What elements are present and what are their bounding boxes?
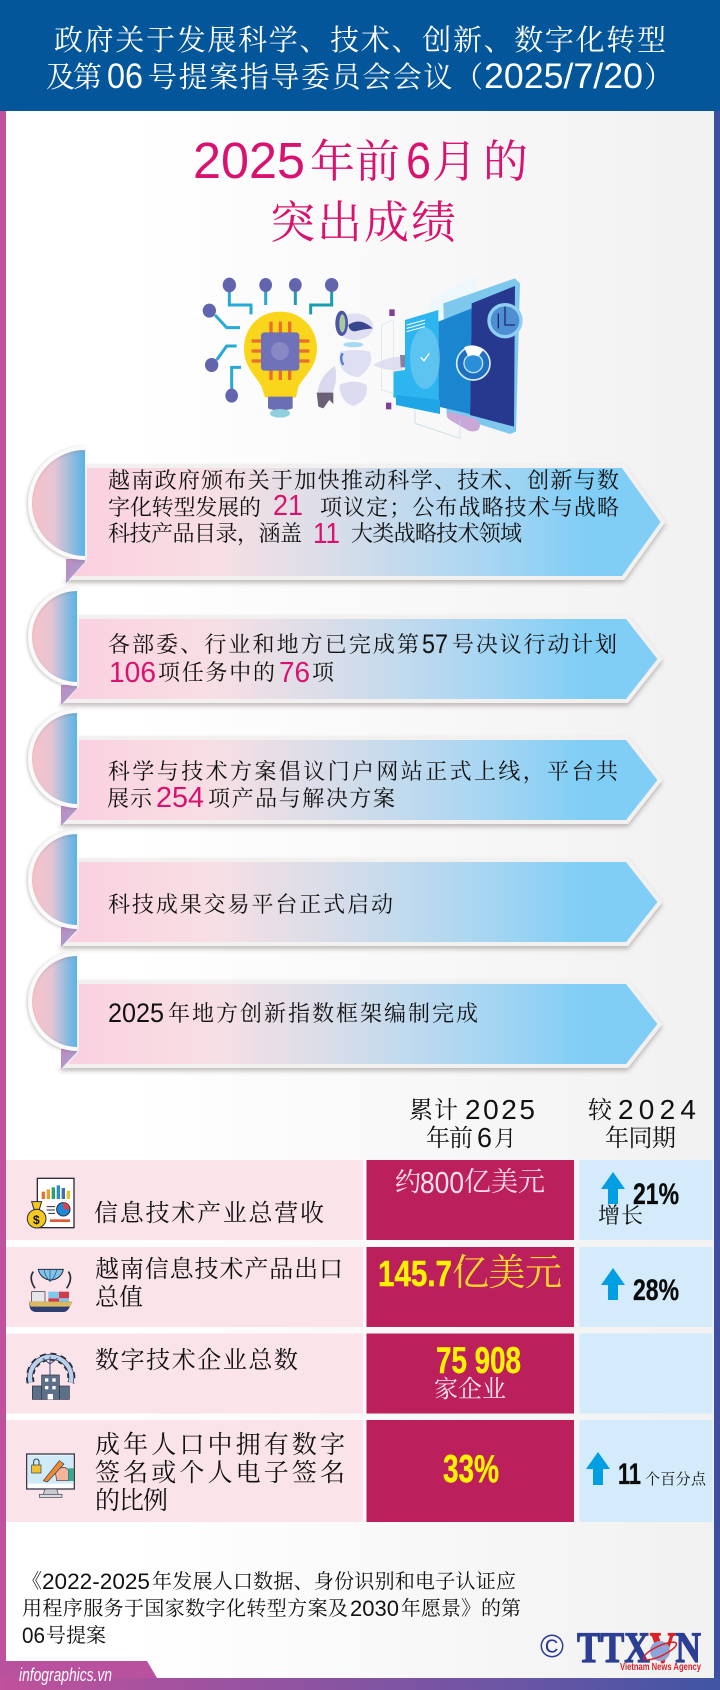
main title: 突出成绩 xyxy=(270,197,456,248)
footnote: source proposal: 用程序服务于国家数字化转型方案及 xyxy=(22,1597,348,1620)
main title xyxy=(193,132,528,248)
text block: 项议定；公布战略技术与战略 xyxy=(320,495,619,520)
text block: 2025 xyxy=(108,998,164,1028)
icon: globe and cargo ship xyxy=(29,1269,72,1312)
footer bar with source tab xyxy=(0,1661,720,1690)
text block: 号决议行动计划 xyxy=(452,632,617,657)
footnote: source proposal: 06 xyxy=(22,1623,45,1648)
column heading: year on year: 2024 xyxy=(618,1094,696,1125)
header title line 2: ） xyxy=(644,62,673,94)
row label: 成年人口中拥有数字 xyxy=(95,1431,345,1459)
icon: light bulb with chip xyxy=(244,312,317,418)
change xyxy=(618,1458,707,1491)
icon: circuit lines xyxy=(203,278,338,403)
text block: 大类战略技术领域 xyxy=(351,521,522,546)
row label: 信息技术产业总营收 xyxy=(94,1200,324,1227)
text block: 57 xyxy=(422,629,448,659)
row label xyxy=(95,1431,345,1515)
main title: 2025 xyxy=(193,132,305,189)
text block: 越南政府颁布关于加快推动科学、技术、创新与数 xyxy=(108,468,619,493)
footnote: source proposal: 《 xyxy=(22,1571,42,1593)
table row 1: IT revenue xyxy=(6,1160,712,1240)
value: 约 xyxy=(395,1167,421,1197)
icon: robot xyxy=(317,311,417,408)
text block xyxy=(108,629,617,689)
text block xyxy=(108,998,478,1028)
header title line 2 xyxy=(46,57,673,96)
text block xyxy=(107,759,618,814)
value xyxy=(395,1165,545,1200)
footnote: source proposal: 号提案 xyxy=(46,1624,106,1647)
icon: computer with signature xyxy=(27,1454,74,1497)
text block: 科学与技术方案倡议门户网站正式上线，平台共 xyxy=(108,759,618,785)
value: 75 908 xyxy=(436,1340,521,1381)
value: 145.7 xyxy=(378,1253,452,1294)
header title line 2: 号提案指导委员会会议（ xyxy=(148,61,483,94)
text block: 254 xyxy=(156,782,204,814)
logo: TTXVN Vietnam News Agency: TTXVN xyxy=(577,1625,701,1672)
change: 28% xyxy=(633,1274,679,1307)
panel: achievement 2 xyxy=(30,589,660,705)
row label: 签名或个人电子签名 xyxy=(95,1459,345,1487)
panel: achievement 1 xyxy=(30,448,663,583)
value xyxy=(378,1252,562,1294)
value: 亿美元 xyxy=(452,1252,562,1293)
text block: 年地方创新指数框架编制完成 xyxy=(168,1001,478,1026)
column heading: cumulative xyxy=(409,1094,535,1153)
text block xyxy=(108,468,619,550)
text block: 展示 xyxy=(107,786,153,811)
value: 800 xyxy=(420,1165,464,1200)
column heading: cumulative: 累计 xyxy=(409,1097,458,1124)
column heading: year on year xyxy=(588,1094,696,1152)
value: 33% xyxy=(443,1448,499,1491)
row label: 总值 xyxy=(95,1284,143,1311)
main title: 月 xyxy=(432,136,477,187)
main title: 6 xyxy=(406,132,431,189)
main title: 年前 xyxy=(310,136,400,187)
column heading: cumulative: 月 xyxy=(494,1126,516,1151)
change note: 增长 xyxy=(598,1203,643,1228)
row label: 越南信息技术产品出口 xyxy=(95,1256,343,1283)
text block: 项任务中的 xyxy=(158,660,275,685)
illustration: light bulb, robot and digital screen xyxy=(203,275,521,438)
text block: 106 xyxy=(109,657,156,689)
value xyxy=(434,1340,521,1403)
table row 3: digital tech enterprises xyxy=(6,1334,712,1414)
header title line 1: 政府关于发展科学、技术、创新、数字化转型 xyxy=(54,24,666,57)
value: 亿美元 xyxy=(464,1167,545,1197)
footnote: source proposal xyxy=(22,1569,521,1648)
text block: 项产品与解决方案 xyxy=(208,786,395,811)
panel: achievement 5 xyxy=(30,954,660,1069)
change: 个百分点 xyxy=(645,1470,707,1488)
logo: TTXVN Vietnam News Agency: © xyxy=(540,1628,564,1664)
table row 4: digital signature share xyxy=(6,1420,712,1522)
icon: up arrow xyxy=(601,1268,625,1300)
column heading: cumulative: 2025 xyxy=(465,1094,535,1125)
icon: report and money bag: $ xyxy=(33,1213,40,1227)
value: 家企业 xyxy=(434,1376,506,1403)
icon: up arrow xyxy=(586,1452,610,1485)
text block: 21 xyxy=(273,490,303,522)
footnote: source proposal: 2022-2025 xyxy=(42,1569,150,1594)
source text: infographics.vn xyxy=(19,1665,112,1685)
text block: 项 xyxy=(312,660,335,685)
table row 2: IT exports xyxy=(6,1247,712,1327)
row label xyxy=(95,1256,343,1311)
icon: up arrow xyxy=(601,1172,625,1204)
icon: gear and office building xyxy=(30,1357,71,1399)
header title line 2: 及第 xyxy=(46,61,102,94)
panel: achievement 4 xyxy=(30,832,660,947)
icon: report and money bag xyxy=(27,1178,74,1228)
header title line 2: 2025/7/20 xyxy=(484,57,643,96)
footnote: source proposal: 2030 xyxy=(350,1596,399,1621)
footnote: source proposal: 年发展人口数据、身份识别和电子认证应 xyxy=(152,1570,516,1593)
text block: 各部委、行业和地方已完成第 xyxy=(108,632,419,657)
header band xyxy=(0,0,720,111)
row label: 的比例 xyxy=(95,1487,168,1515)
column heading: year on year: 年同期 xyxy=(605,1125,676,1152)
text block: 字化转型发展的 xyxy=(108,495,261,520)
column heading: cumulative: 年前 xyxy=(426,1125,473,1152)
icon: digital screen xyxy=(382,275,521,438)
change: 21% xyxy=(633,1178,679,1211)
column heading: year on year: 较 xyxy=(588,1097,613,1124)
footnote: source proposal: 年愿景》的第 xyxy=(401,1597,521,1620)
text block: 科技成果交易平台正式启动 xyxy=(108,892,393,917)
panel: achievement 3 xyxy=(30,711,660,826)
text block: 11 xyxy=(313,518,340,550)
change: 11 xyxy=(618,1458,641,1491)
row label: 数字技术企业总数 xyxy=(95,1347,298,1374)
column heading: cumulative: 6 xyxy=(477,1122,492,1153)
header title line 2: 06 xyxy=(107,57,143,96)
main title: 的 xyxy=(483,136,528,187)
text block: 科技产品目录，涵盖 xyxy=(108,521,302,547)
text block: 76 xyxy=(279,657,310,689)
